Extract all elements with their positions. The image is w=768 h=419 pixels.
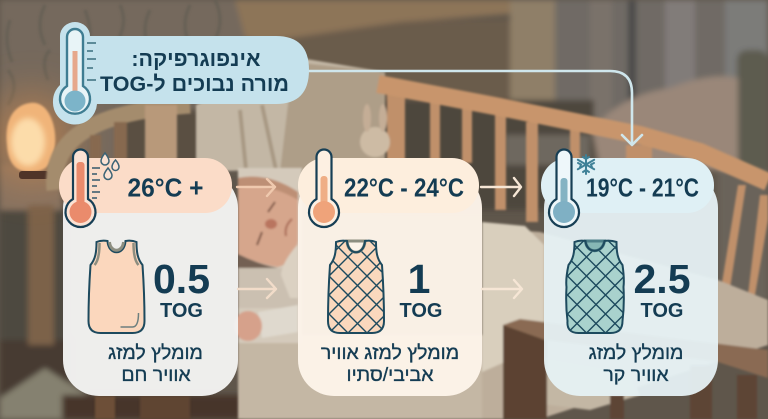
temperature label 19-21C: 19°C - 21°C: [586, 174, 699, 202]
recommendation text moderate: מומלץ למזג אוויר: [321, 342, 459, 364]
recommendation text moderate: [321, 342, 459, 386]
icon: mild thermometer: [309, 150, 339, 227]
rating 2.5 TOG: [634, 256, 690, 322]
panel: moderate climate card: [298, 150, 482, 412]
blanket: [196, 58, 385, 172]
arrows between cards: [237, 178, 522, 298]
recommendation text cold: אוויר קר: [603, 364, 669, 386]
connector line from title to third card: [306, 71, 642, 145]
recommendation text cold: [589, 342, 683, 386]
icon: cold thermometer: [549, 150, 579, 227]
icon: snowflake: [578, 155, 594, 174]
temperature pill 22-24C: [298, 158, 479, 213]
title text: אינפוגרפיקה:: [131, 47, 261, 71]
crib slats: [387, 92, 768, 295]
icon: padded sleeping bag: [565, 240, 625, 334]
icon: quilted sleeping bag: [327, 240, 385, 334]
title text: מורה נבוכים ל-TOG: [100, 72, 289, 96]
temperature label 26C: 26°C +: [128, 174, 204, 202]
rating 1 TOG: [400, 256, 442, 322]
foreground crib post: [503, 325, 547, 419]
recommendation text warm: [108, 342, 203, 386]
rating 0.5 TOG: 0.5: [153, 256, 210, 302]
title thermometer halo: [53, 22, 309, 125]
temperature label 22-24C: 22°C - 24°C: [344, 174, 464, 202]
sleeping sack on mattress: [482, 222, 544, 372]
crib top rail: [378, 84, 768, 182]
baby face: [238, 177, 298, 267]
rating 2.5 TOG: TOG: [641, 300, 683, 322]
icon: hot thermometer: [66, 150, 100, 227]
icon: title thermometer: [60, 29, 96, 114]
wallpaper leaves: [7, 0, 220, 105]
recommendation text warm: אוויר חם: [121, 364, 191, 386]
rating 0.5 TOG: [153, 256, 210, 322]
pillow: [238, 168, 302, 343]
panel: cold climate card: [541, 150, 718, 412]
icon: water drops: [101, 153, 119, 180]
baby arm and collar: [281, 244, 298, 298]
title banner: [53, 22, 309, 125]
temperature pill 19-21C: [541, 158, 714, 213]
recommendation text cold: מומלץ למזג: [589, 342, 683, 364]
temperature pill 26C: [59, 158, 232, 213]
rating 1 TOG: TOG: [400, 300, 442, 322]
panel: warm climate card: [59, 150, 238, 396]
recommendation text warm: מומלץ למזג: [108, 342, 203, 364]
rating 1 TOG: 1: [408, 256, 430, 302]
title text: [100, 47, 289, 96]
salt lamp: [0, 92, 78, 184]
mattress: [238, 335, 538, 419]
rating 2.5 TOG: 2.5: [634, 256, 690, 302]
icon: light sleeping bag: [88, 241, 144, 333]
left crib rail: [55, 105, 190, 190]
rabbit toy: [360, 127, 390, 157]
rating 0.5 TOG: TOG: [160, 300, 203, 322]
recommendation text moderate: אביבי/סתיו: [347, 364, 433, 386]
